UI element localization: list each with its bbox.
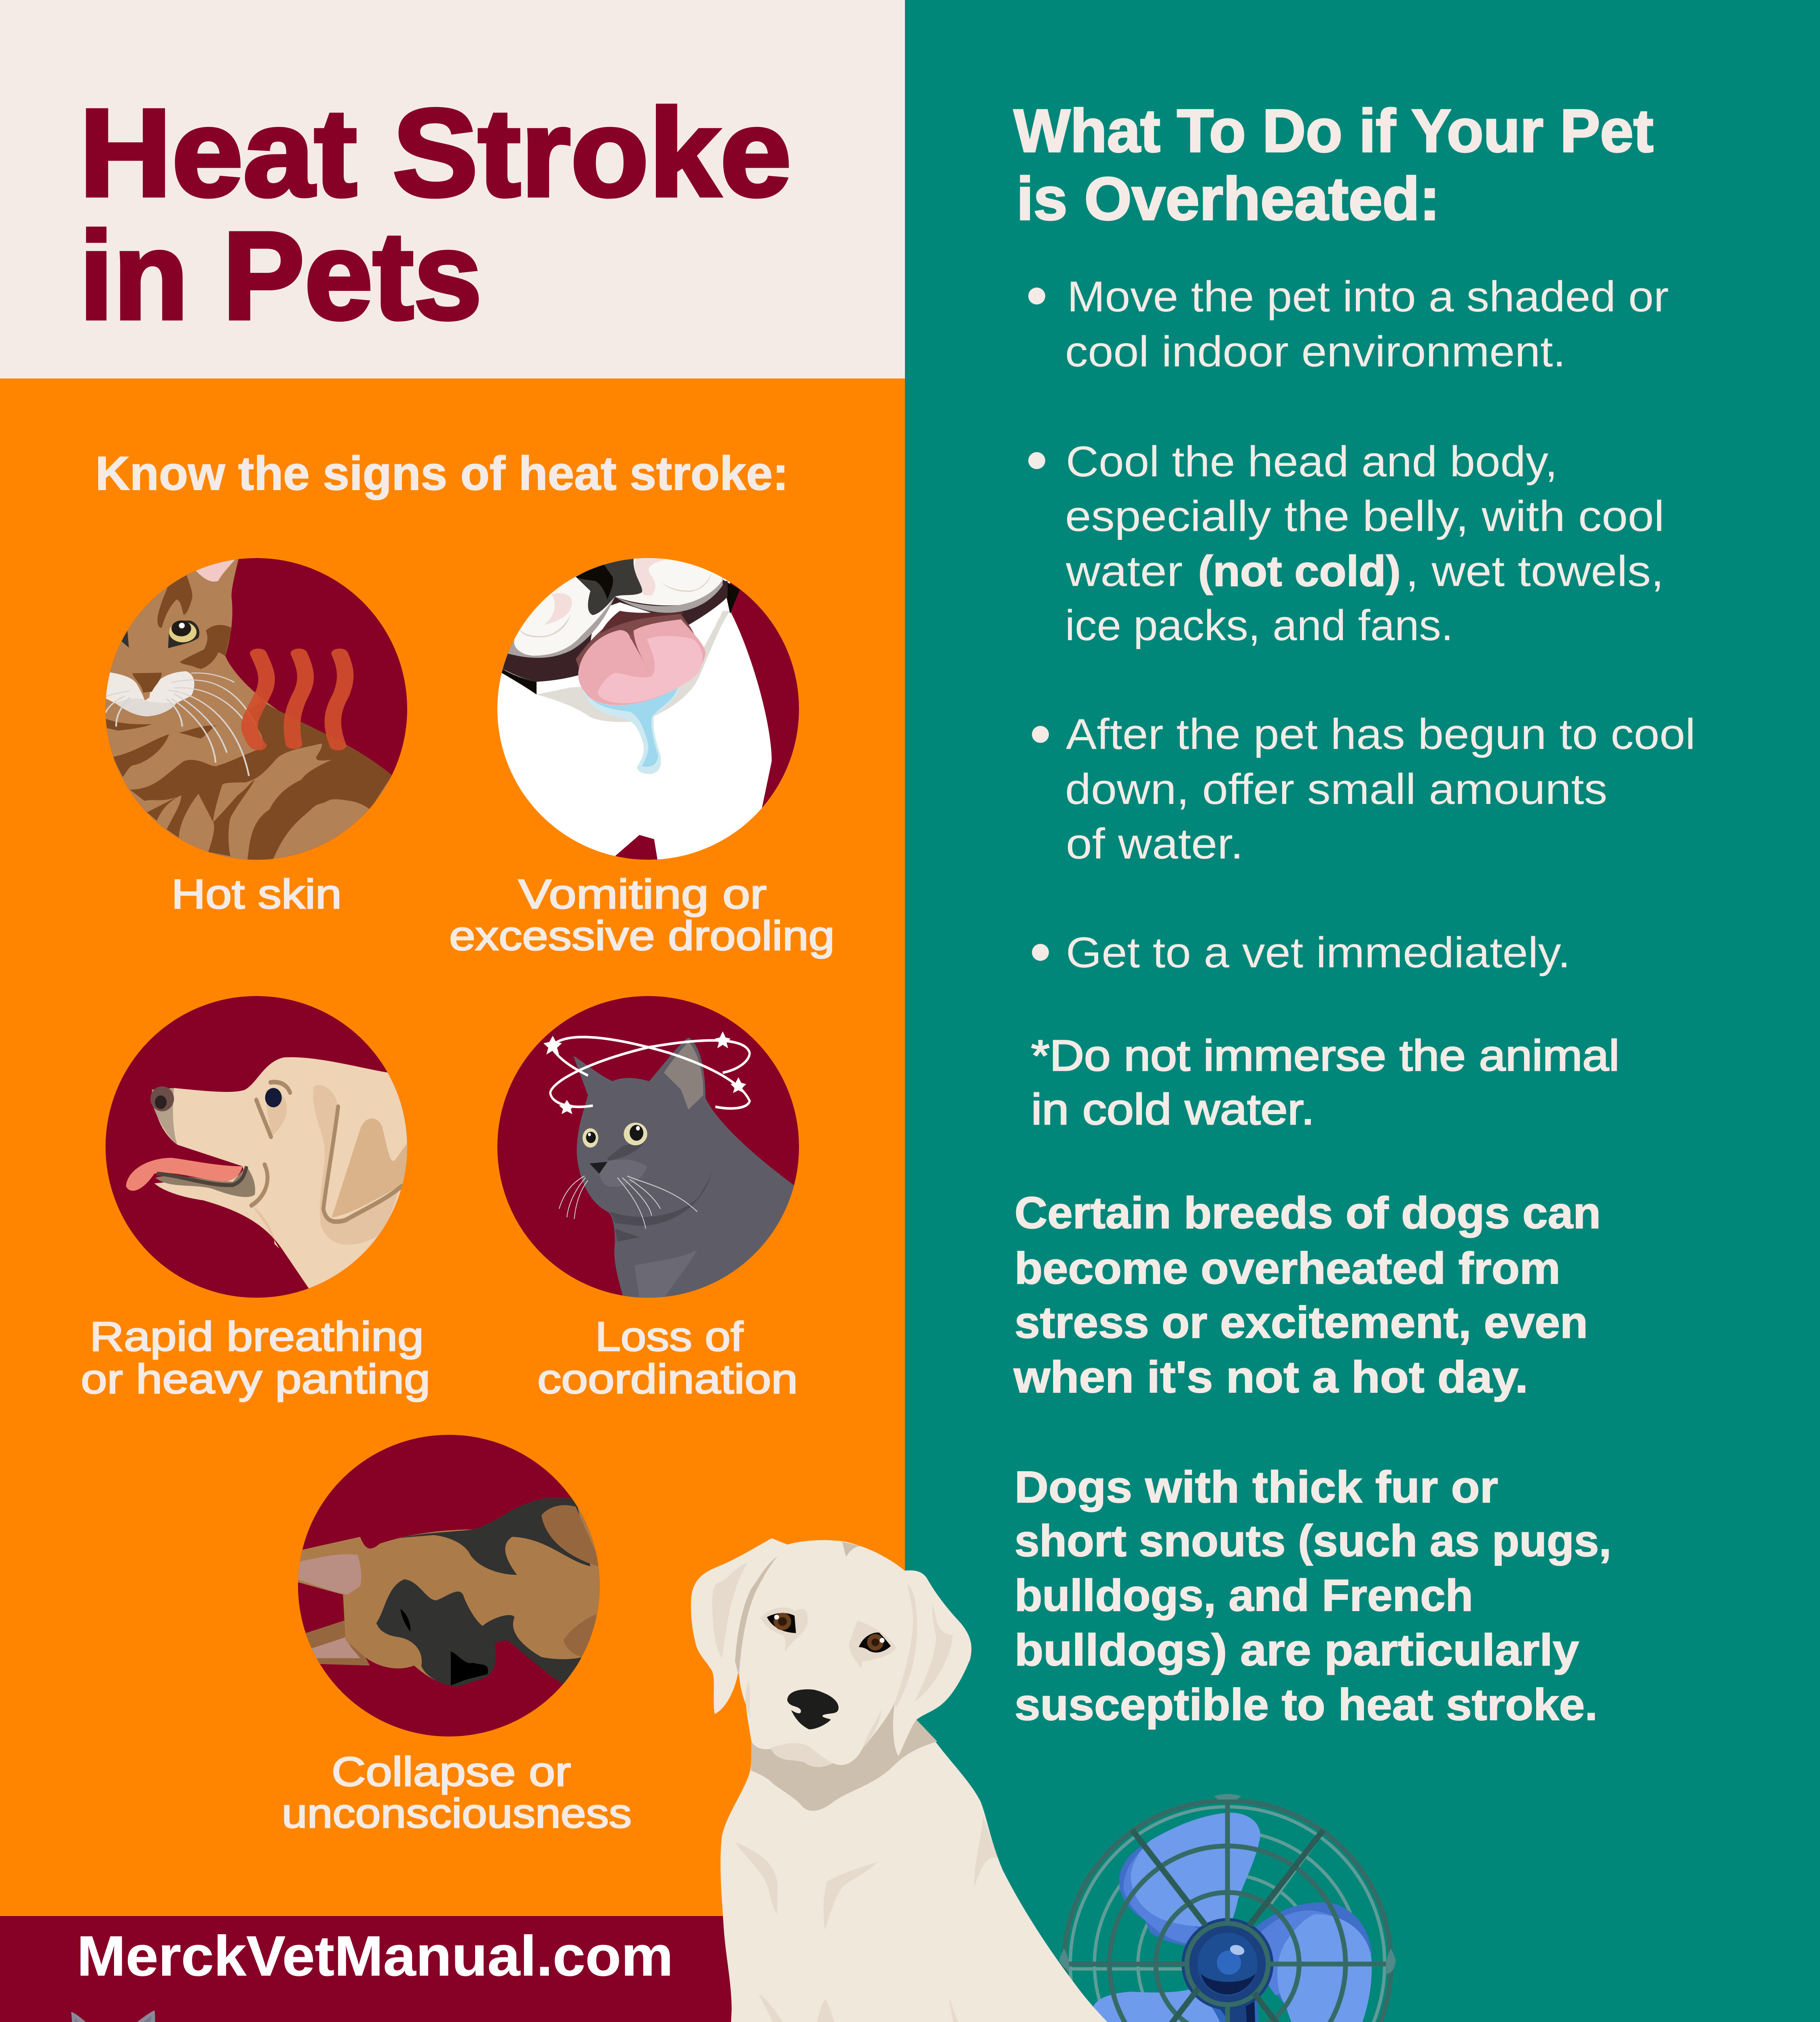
warning note: *Do not immerse the animal (1031, 1031, 1619, 1080)
label: loss of coordination (537, 1313, 798, 1402)
fan back grille (1067, 1807, 1385, 2022)
dog body (664, 1710, 1419, 2022)
bullet: after the pet has begun to cool: down, offer small amounts (1065, 765, 1607, 813)
label: loss of coordination: Loss of (595, 1313, 744, 1360)
warning note (1031, 1031, 1619, 1134)
text block: breeds overheated: become overheated from (1015, 1244, 1560, 1293)
bullet: cool the head and body: , wet towels, (1406, 547, 1664, 595)
icon: dizzy cat (497, 996, 801, 1311)
label: rapid breathing or heavy panting (81, 1313, 430, 1402)
background: teal column (905, 0, 1820, 2022)
heading: what to do: What To Do if Your Pet (1014, 97, 1653, 165)
heading: what to do: is Overheated: (1017, 165, 1440, 233)
icon: drooling dog (495, 554, 806, 863)
label: collapse or unconsciousness: Collapse or (332, 1749, 571, 1795)
label: loss of coordination: coordination (537, 1356, 798, 1402)
fan blades (1092, 1813, 1372, 2022)
text block: thick fur and short snouts: susceptible to heat stroke. (1015, 1680, 1598, 1730)
illustration: electric fan (1059, 1794, 1396, 2022)
dog eyes (767, 1613, 891, 1652)
text block: thick fur and short snouts (1015, 1462, 1611, 1730)
bullet: after the pet has begun to cool: of water. (1066, 819, 1243, 868)
bullet: cool the head and body: (not cold) (1198, 547, 1401, 595)
fan hub (1182, 1918, 1273, 2010)
text block: breeds overheated: stress or excitement, even (1015, 1298, 1588, 1347)
bullet: cool the head and body: ice packs, and fans. (1065, 601, 1453, 649)
panel: title band (0, 0, 905, 379)
panel: website footer (0, 1916, 905, 2022)
fan stand (1194, 1990, 1266, 2022)
bullet: cool the head and body: Cool the head and body, (1066, 437, 1558, 486)
bullet: cool the head and body: water (1065, 547, 1183, 595)
fan front grille (1063, 1800, 1392, 2022)
label: hot skin: Hot skin (171, 871, 342, 917)
text block: thick fur and short snouts: bulldogs, and French (1015, 1571, 1473, 1620)
label: vomiting or excessive drooling: excessive drooling (449, 913, 835, 959)
text block: breeds overheated: Certain breeds of dogs can (1015, 1188, 1601, 1238)
illustration: sitting dog (664, 1538, 1419, 2022)
text block: breeds overheated (1013, 1188, 1601, 1402)
label: rapid breathing or heavy panting: or heavy panting (81, 1356, 430, 1402)
text block: breeds overheated: when it's not a hot day. (1013, 1352, 1528, 1402)
bullet: get to a vet: Get to a vet immediately. (1066, 928, 1571, 977)
bullet: move the pet (1028, 272, 1669, 376)
bullet: move the pet: Move the pet into a shaded or (1067, 272, 1669, 321)
title (79, 83, 791, 345)
text block: thick fur and short snouts: short snouts (such as pugs, (1015, 1516, 1611, 1566)
bullet: move the pet: cool indoor environment. (1065, 327, 1566, 376)
dog neck shadow (751, 1701, 937, 1811)
title: Heat Stroke (79, 83, 791, 222)
icon: panting dog (106, 996, 424, 1311)
panel: signs of heat stroke (0, 379, 905, 1916)
icon: hot skin cat (100, 558, 414, 863)
title: in Pets (79, 206, 482, 345)
dog body shading (736, 1817, 1095, 2022)
dog nose (787, 1689, 839, 1729)
label: collapse or unconsciousness: unconsciousness (282, 1790, 632, 1836)
bullet: after the pet has begun to cool (1032, 710, 1695, 868)
bullet: cool the head and body (1028, 437, 1664, 649)
bullet: cool the head and body: especially the belly, with cool (1065, 492, 1664, 540)
illustration: grey cat (64, 2010, 526, 2022)
label: rapid breathing or heavy panting: Rapid breathing (90, 1313, 424, 1360)
warning note: in cold water. (1031, 1085, 1315, 1134)
website url: MerckVetManual.com (77, 1924, 673, 1988)
heading: know the signs: Know the signs of heat stroke: (95, 447, 788, 500)
heading: what to do (1014, 97, 1653, 233)
label: collapse or unconsciousness (282, 1749, 632, 1836)
text block: thick fur and short snouts: Dogs with thick fur or (1015, 1462, 1498, 1512)
text block: thick fur and short snouts: bulldogs) are particularly (1015, 1625, 1579, 1675)
bullet: after the pet has begun to cool: After the pet has begun to cool (1066, 710, 1695, 758)
label: vomiting or excessive drooling: Vomiting or (518, 871, 767, 917)
icon: collapsed dog (292, 1435, 605, 1736)
dog head (691, 1538, 971, 1767)
label: vomiting or excessive drooling (449, 871, 835, 959)
